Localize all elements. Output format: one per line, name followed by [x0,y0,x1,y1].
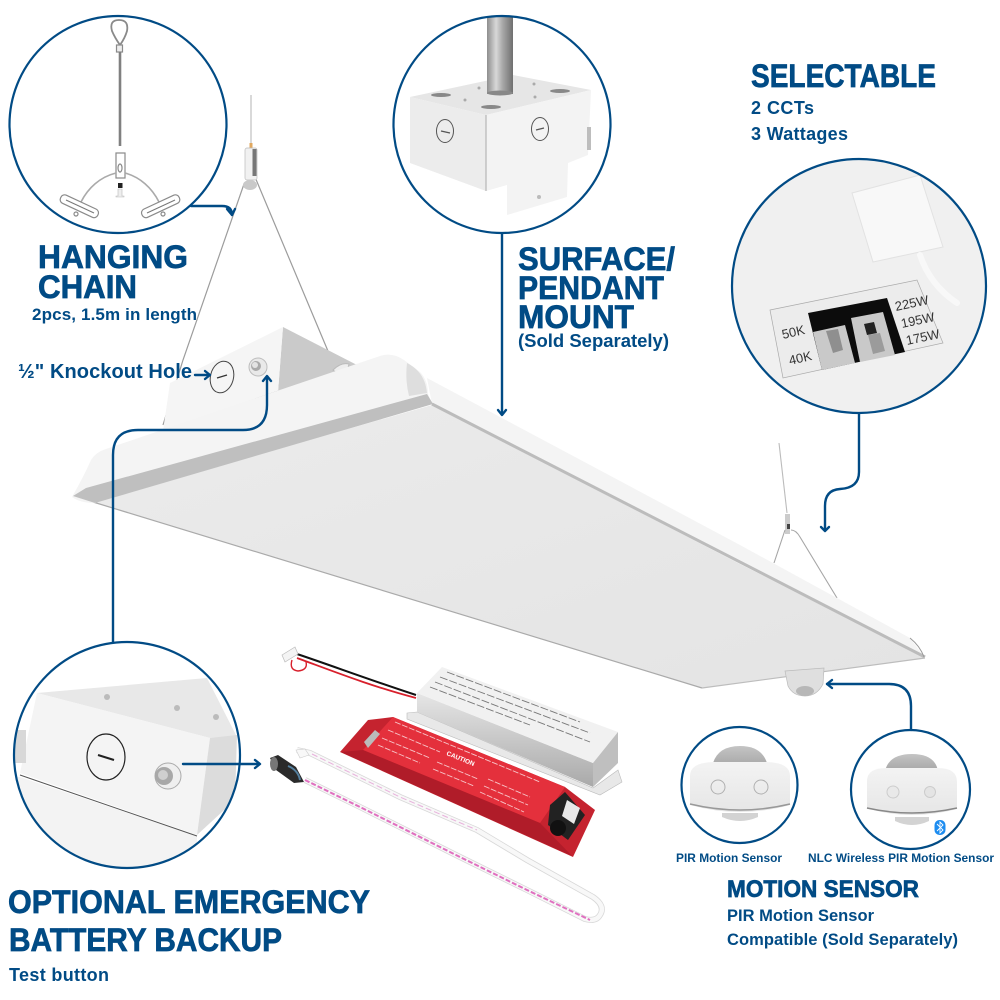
test button [249,358,267,376]
switch values: 50K [780,322,807,342]
heading: optional emergency battery backup [8,884,370,958]
panel: hanging chain circle [10,16,226,233]
test button and flat cable [270,749,602,920]
heading: surface pendant mount: MOUNT [518,299,634,335]
left hanging wires [163,95,333,425]
label: knockout hole: ½" Knockout Hole [18,361,192,383]
switch values: 175W [905,326,942,348]
test button [155,763,181,789]
arrow: button to battery kit [183,760,260,768]
junction box [163,327,357,431]
chain illustration [59,20,181,219]
knockout [87,734,125,780]
front end bar [72,355,432,503]
heading: surface pendant mount [518,241,675,335]
heading: surface pendant mount: SURFACE/ [518,241,675,277]
mount right face [486,90,591,215]
text: motion sensor details [727,907,958,949]
diffuser panel [93,405,925,688]
switch values [782,295,938,364]
knockout hole [207,359,237,395]
text: test button: Test button [9,965,109,985]
light fixture [72,95,925,696]
heading: hanging chain [38,239,188,305]
heading: motion sensor: MOTION SENSOR [727,876,919,903]
panel: PIR sensor circle [682,727,798,843]
switch values: 225W [894,292,931,314]
arrow: selectable switch [821,414,859,531]
heading: optional emergency battery backup: OPTIONAL EMERGENCY [8,884,370,920]
switch values: 195W [900,309,937,331]
text: selectable details [751,98,848,144]
text: selectable details: 2 CCTs [751,98,814,118]
pendant pole [487,10,513,94]
arrow: test button to emergency circle [113,376,271,642]
caption: PIR sensor: PIR Motion Sensor [676,851,782,865]
text: motion sensor details: Compatible (Sold Separately) [727,931,958,949]
mount top plate [410,75,591,115]
panel: NLC wireless sensor circle [851,730,970,849]
mount left face [410,97,486,191]
switch label [770,280,943,378]
right hanging wires [774,443,837,598]
knockouts [436,118,548,142]
caption: NLC sensor: NLC Wireless PIR Motion Sensor [808,851,994,865]
silver driver box [407,667,622,795]
arrow: mount [498,234,506,415]
heading: hanging chain: HANGING [38,239,188,275]
sticker [852,175,943,262]
heading: selectable: SELECTABLE [751,58,936,94]
panel: emergency button circle [10,640,250,870]
panel: surface/pendant mount circle [394,10,610,233]
side rim [427,378,925,658]
arrow: motion sensor [827,680,911,730]
wires and connector [282,647,416,698]
text: chain length: 2pcs, 1.5m in length [32,305,197,324]
emergency battery module [270,647,622,920]
caution text: CAUTION [445,750,476,768]
icon: bluetooth [934,820,946,835]
heading: hanging chain: CHAIN [38,269,137,305]
text: selectable details: 3 Wattages [751,124,848,144]
panel: selectable switch circle [732,159,986,413]
red driver tray [340,717,595,857]
arrow: knockout hole [195,371,210,379]
text: sold separately: (Sold Separately) [518,330,669,351]
heading: surface pendant mount: PENDANT [518,270,664,306]
arrow: hanging chain [191,206,235,215]
sensor on fixture [785,668,824,696]
switch values: 40K [787,348,814,368]
text: motion sensor details: PIR Motion Sensor [727,907,875,925]
heading: optional emergency battery backup: BATTERY BACKUP [9,922,282,958]
